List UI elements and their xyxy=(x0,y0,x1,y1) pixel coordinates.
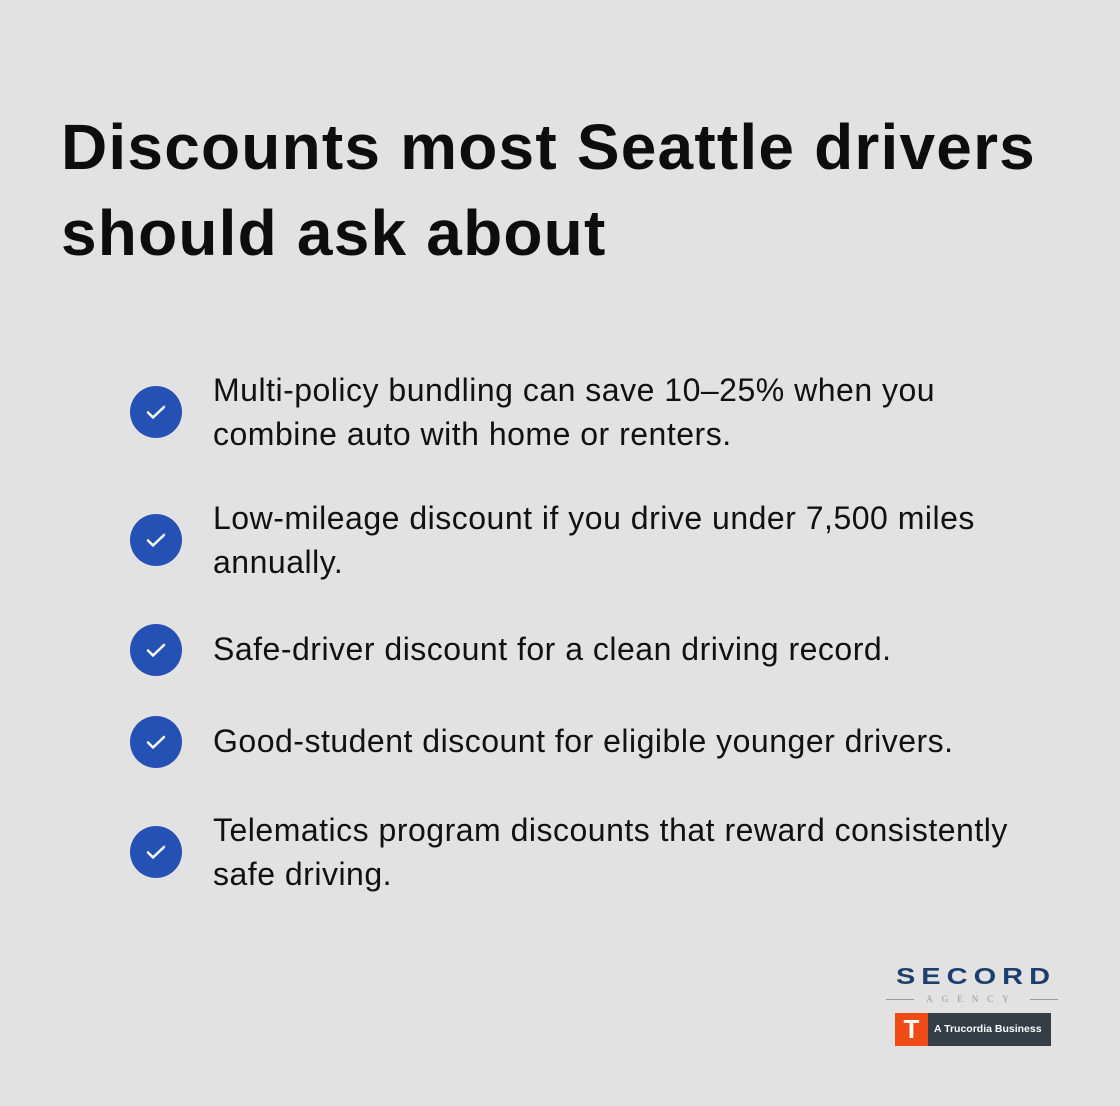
item 3 xyxy=(130,624,892,676)
logo: agency: AGENCY xyxy=(926,994,1018,1004)
text: combine auto with home or renters. xyxy=(213,416,732,452)
icon: check xyxy=(130,624,182,676)
logo: trucordia badge: A Trucordia Business xyxy=(934,1023,1042,1035)
item 5 xyxy=(130,812,1008,892)
text xyxy=(213,372,935,452)
text: Low-mileage discount if you drive under 7,500 miles xyxy=(213,500,975,536)
icon: check xyxy=(130,716,182,768)
text: Multi-policy bundling can save 10–25% when you xyxy=(213,372,935,408)
icon: check xyxy=(130,386,182,438)
text: annually. xyxy=(213,544,343,580)
logo: secord: SECORD xyxy=(896,964,1056,990)
icon: check xyxy=(130,514,182,566)
item 2 xyxy=(130,500,975,580)
logo: trucordia badge: T xyxy=(904,1014,919,1044)
item 1 xyxy=(130,372,935,452)
logo: trucordia badge xyxy=(895,1013,1051,1046)
text xyxy=(213,500,975,580)
title: Discounts most Seattle drivers xyxy=(61,111,1036,183)
icon: check xyxy=(130,826,182,878)
item 4 xyxy=(130,716,954,768)
text: safe driving. xyxy=(213,856,392,892)
logo xyxy=(886,964,1058,1046)
text xyxy=(213,812,1008,892)
title xyxy=(61,111,1036,269)
text: Telematics program discounts that reward consistently xyxy=(213,812,1008,848)
title: should ask about xyxy=(61,197,606,269)
text: Safe-driver discount for a clean driving record. xyxy=(213,631,892,667)
text: Good-student discount for eligible younger drivers. xyxy=(213,723,954,759)
